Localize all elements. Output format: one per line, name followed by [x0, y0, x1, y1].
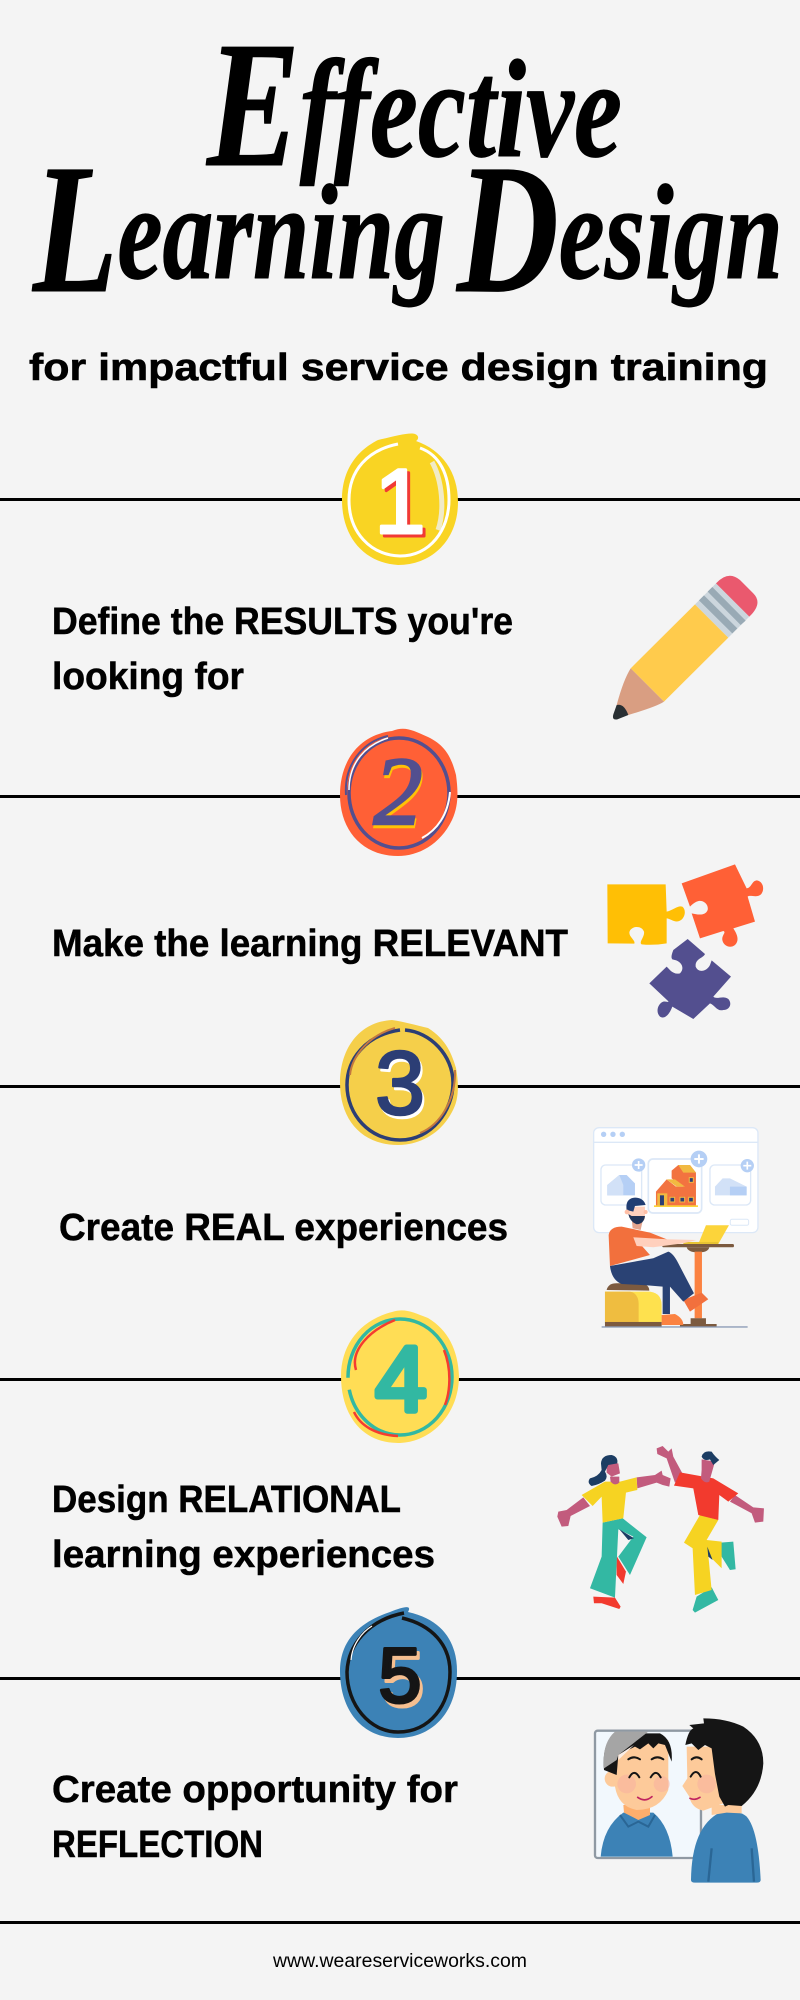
step 5 text: [52, 1769, 458, 1866]
number badge 4: 4: [375, 1329, 427, 1431]
title: earning: [117, 158, 445, 308]
puzzle piece purple: [649, 939, 731, 1019]
icon: man working at laptop: [594, 1128, 758, 1328]
title: D: [455, 127, 559, 332]
number badge 1: [342, 433, 458, 565]
man: [609, 1198, 708, 1325]
footer website: www.weareserviceworks.com: [272, 1951, 527, 1972]
number badge 3: 3: [377, 1037, 427, 1137]
step 5 text: REFLECTION: [52, 1824, 263, 1866]
icon: puzzle pieces: [607, 864, 763, 1019]
number badge 3: 3: [375, 1034, 425, 1134]
number badge 2: 2: [374, 738, 422, 846]
number badge 4: [341, 1310, 459, 1443]
step 4 text: [52, 1479, 435, 1576]
stool: [602, 1283, 748, 1328]
laptop and table: [662, 1225, 734, 1327]
number badge 1: 1: [374, 451, 426, 553]
man: [657, 1446, 764, 1613]
number badge 1: 1: [377, 454, 429, 556]
number badge 2: 2: [374, 741, 424, 849]
title: [32, 5, 783, 332]
person: [682, 1718, 763, 1883]
step 5 text: Create opportunity for: [52, 1769, 458, 1811]
woman: [557, 1455, 671, 1609]
number badge 2: [340, 729, 457, 856]
puzzle piece yellow: [607, 884, 685, 945]
icon: person looking in mirror: [595, 1718, 763, 1883]
puzzle piece orange: [682, 864, 763, 947]
mirror: [595, 1731, 701, 1858]
house: [654, 1165, 698, 1207]
title: L: [32, 127, 117, 332]
step 3 text: Create REAL experiences: [59, 1207, 508, 1249]
title: E: [205, 5, 300, 204]
step 4 text: learning experiences: [52, 1534, 435, 1576]
subtitle: for impactful service design training: [29, 347, 768, 389]
step 1 text: [52, 601, 513, 698]
step 1 text: Define the RESULTS you're: [52, 601, 513, 643]
title: ffective: [300, 32, 622, 187]
step 2 text: Make the learning RELEVANT: [52, 923, 568, 965]
browser window: [594, 1128, 758, 1233]
step 4 text: Design RELATIONAL: [52, 1479, 401, 1521]
number badge 5: 5: [378, 1631, 422, 1719]
icon: pencil: [613, 576, 757, 719]
number badge 5: 5: [381, 1635, 425, 1723]
reflection: [601, 1732, 673, 1857]
number badge 5: [340, 1607, 457, 1738]
step 1 text: looking for: [52, 656, 244, 698]
number badge 3: [340, 1020, 458, 1145]
icon: two people high-fiving: [557, 1446, 764, 1613]
section dividers: [0, 498, 800, 1924]
